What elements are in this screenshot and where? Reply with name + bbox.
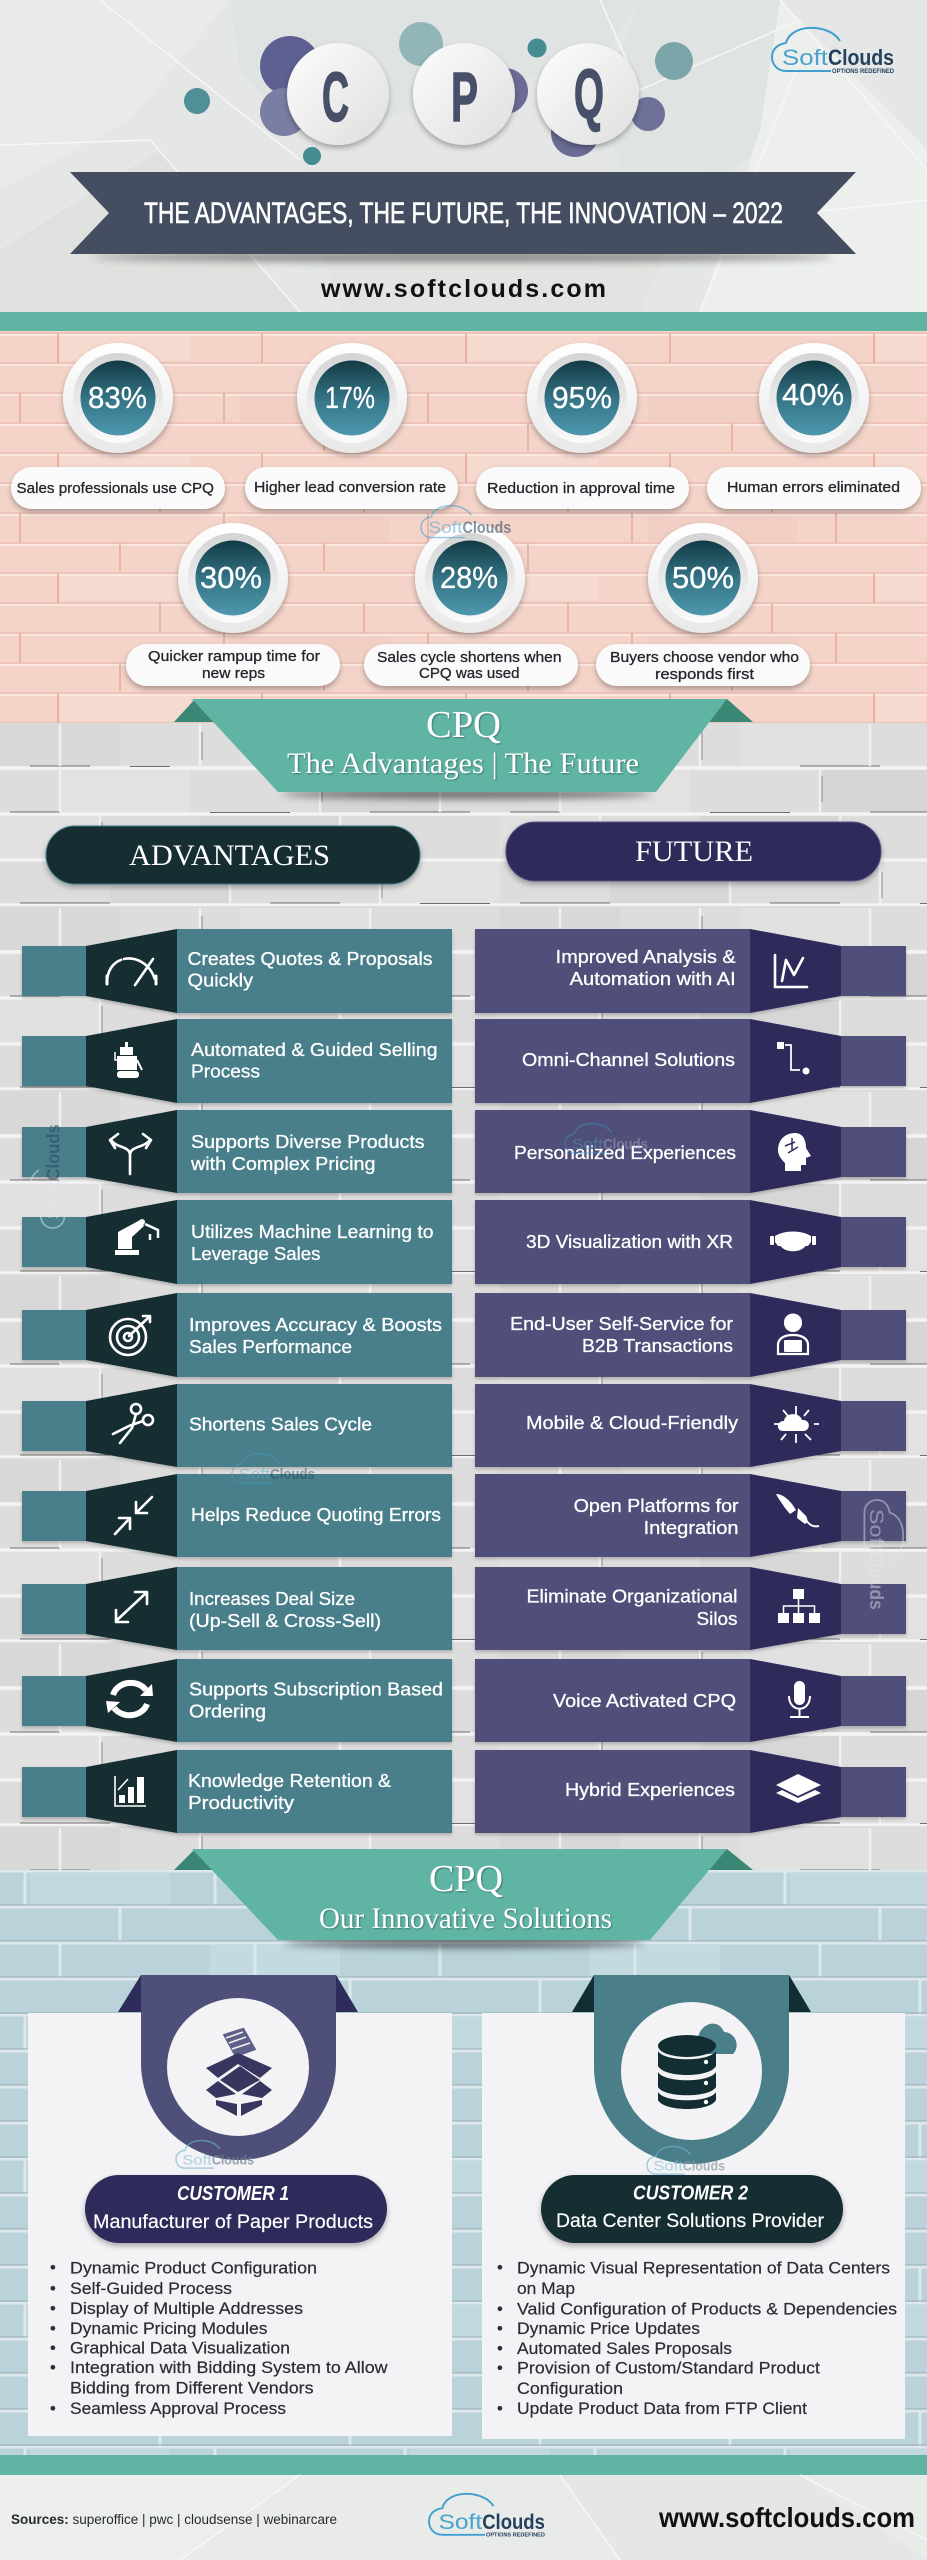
watermark customer 2: Clouds [683,2157,725,2173]
customer 2 list: • [497,2300,503,2318]
banner: the advantages the future [174,699,753,799]
label: human errors: Human errors eliminated [727,479,900,496]
icon: arrows inward [115,1497,152,1534]
stat: 28% [415,523,525,633]
title letter Q: Q [574,55,604,133]
logo footer: Soft [438,2511,482,2534]
customer 1 list: Integration with Bidding System to Allow [70,2359,388,2377]
future 4: 3D Visualization with XR [526,1232,733,1252]
advantage 5: Improves Accuracy & Boosts [189,1315,442,1335]
footer green bar [0,2455,927,2475]
icon: line chart [775,955,807,987]
customer 1 list: • [50,2359,56,2377]
customer 1 list: Display of Multiple Addresses [70,2300,303,2318]
future 7: Integration [644,1518,739,1538]
label: rampup time: new reps [202,665,265,682]
icon: robot arm [115,1219,158,1255]
future 5: B2B Transactions [582,1336,733,1356]
watermark customer 1: Soft [182,2151,212,2167]
title letter C [287,43,389,145]
customer 2 list: • [497,2360,503,2378]
gray brick background [0,723,927,1870]
label: rampup time [126,644,340,686]
footer background [0,2475,927,2560]
advantage 10 [22,1750,452,1833]
banner: our innovative solutions: CPQ [429,1858,503,1900]
logo top right: Soft [782,45,828,70]
future 1: Improved Analysis & [556,947,736,967]
banner: the advantages the future: The Advantages | The Future [287,747,639,780]
customer 1 list: • [50,2400,56,2418]
advantage 3: with Complex Pricing [190,1154,376,1174]
heading pill: future [506,822,881,881]
advantage 1 [22,929,452,1013]
icon: org chart [778,1589,820,1623]
icon: cloud network [774,1406,819,1443]
customer 2 list: Automated Sales Proposals [517,2340,732,2358]
watermark vertical right: Clouds [865,1550,887,1610]
advantage 4: Leverage Sales [191,1244,320,1264]
watermark customer 2 [647,2147,725,2174]
watermark lower left [232,1454,315,1483]
future 5: End-User Self-Service for [510,1314,733,1334]
watermark customer 1 [176,2141,254,2168]
watermark pink [421,506,511,538]
customer 2 pill: Data Center Solutions Provider [556,2211,825,2232]
future 5 [475,1293,906,1377]
customer 1 list [50,2259,388,2418]
sources: Sources: superoffice | pwc | cloudsense | webinarcare [11,2512,337,2527]
advantage 8: Increases Deal Size [189,1589,355,1609]
watermark vertical left: Soft [42,1179,63,1220]
label: rampup time: Quicker rampup time for [148,648,320,665]
icon: arrows outward [116,1592,147,1622]
future 8: Silos [696,1609,738,1629]
label: vendor: Buyers choose vendor who [610,649,799,666]
watermark vertical left: Clouds [42,1124,63,1180]
icon: refresh [106,1683,153,1715]
customer 2 list: • [497,2400,503,2418]
advantage 9: Ordering [189,1702,266,1722]
icon: scissors [113,1404,153,1443]
customer 1 list: Dynamic Pricing Modules [70,2320,268,2338]
advantage 7: Helps Reduce Quoting Errors [191,1505,441,1525]
blue brick background [0,1870,927,2455]
ribbon badge 2 [572,1975,811,2164]
icon: microphone [789,1681,810,1717]
advantage 4: Utilizes Machine Learning to [191,1222,434,1242]
future 3: Personalized Experiences [514,1143,736,1163]
watermark customer 1: Clouds [212,2151,254,2167]
label: approval time: Reduction in approval time [487,480,675,497]
stat: 95% [527,343,637,453]
future 10: Hybrid Experiences [565,1780,735,1800]
heading pill: advantages: ADVANTAGES [129,839,330,872]
label: sales cycle [364,644,578,686]
logo footer: OPTIONS REDEFINED [486,2533,545,2539]
label: approval time [476,467,689,509]
label: vendor: responds first [655,666,755,683]
future 8: Eliminate Organizational [526,1586,738,1606]
decorative circles [184,22,693,165]
title letter P: P [451,58,478,136]
icon: head [778,1133,811,1171]
customer 2 list: on Map [517,2280,575,2298]
customer 1 list: • [50,2340,56,2358]
icon: person at laptop [778,1314,808,1354]
icon: cloud database [658,2024,737,2109]
title letter P [413,43,515,145]
watermark customer 2: Soft [653,2157,683,2173]
advantage 2: Automated & Guided Selling [191,1040,438,1060]
advantage 1: Creates Quotes & Proposals [188,949,432,969]
customer 2 list: Valid Configuration of Products & Dependencies [517,2300,897,2318]
future 1 [475,929,906,1013]
advantage 6: Shortens Sales Cycle [189,1414,372,1434]
advantage 6 [22,1384,452,1467]
customer 2 list: Dynamic Visual Representation of Data Centers [517,2260,890,2278]
logo top right [772,28,895,75]
future 7 [475,1474,906,1557]
watermark vertical right [864,1500,903,1610]
advantage 4 [22,1200,452,1284]
customer 2 list: Dynamic Price Updates [517,2320,700,2338]
watermark right [565,1124,648,1153]
icon: plug [776,1494,819,1526]
watermark right: Soft [572,1136,604,1153]
advantage 8 [22,1567,452,1650]
banner: our innovative solutions [174,1849,753,1948]
advantage 9 [22,1659,452,1742]
future 3 [475,1110,906,1193]
customer 2 list: • [497,2320,503,2338]
icon: flow [777,1042,810,1074]
label: sales cycle: Sales cycle shortens when [377,649,562,666]
icon: layers [776,1774,821,1803]
advantage 2: Process [191,1062,260,1082]
header background [0,0,927,312]
advantage 5: Sales Performance [189,1337,352,1357]
customer 2 pill [541,2175,843,2243]
customer 1 pill: CUSTOMER 1 [177,2183,289,2205]
future 2: Omni-Channel Solutions [522,1050,735,1070]
logo footer: Clouds [482,2511,545,2534]
customer 1 list: • [50,2259,56,2277]
future 1: Automation with AI [570,969,736,989]
future 7: Open Platforms for [574,1496,739,1516]
customer 1 list: Self-Guided Process [70,2280,232,2298]
label: lead conversion: Higher lead conversion rate [254,479,446,496]
stat: 83%: 83% [88,380,147,415]
watermark lower left: Clouds [270,1466,315,1483]
advantage 7 [22,1474,452,1557]
watermark vertical right: Soft [865,1509,887,1551]
icon: robot [115,1042,142,1078]
advantage 3: Supports Diverse Products [191,1132,425,1152]
future 9 [475,1659,906,1742]
logo footer [429,2494,545,2539]
customer 2 list: Configuration [517,2380,623,2398]
advantage 2 [22,1019,452,1103]
heading pill: future: FUTURE [635,835,753,868]
future 8 [475,1567,906,1650]
customer 1 list: Graphical Data Visualization [70,2340,290,2358]
icon: bar chart [115,1776,146,1806]
stat: 30% [178,523,288,633]
advantage 8: (Up-Sell & Cross-Sell) [189,1611,381,1631]
customer 2 list: Update Product Data from FTP Client [517,2400,807,2418]
label: human errors [707,467,921,509]
label: sales cycle: CPQ was used [419,665,520,682]
panel: customer 1 [28,1975,452,2436]
icon: xr goggles [770,1232,816,1251]
advantage 10: Productivity [188,1793,294,1813]
advantage 1: Quickly [188,970,253,990]
customer 1 list: • [50,2320,56,2338]
future 10 [475,1750,906,1833]
future 6 [475,1384,906,1467]
stat: 95%: 95% [552,380,612,415]
title letter C: C [322,58,349,136]
panel: customer 2 [482,1975,905,2439]
stat: 83% [63,343,173,453]
customer 2 pill: CUSTOMER 2 [633,2182,748,2204]
future 9: Voice Activated CPQ [553,1691,736,1711]
label: sales professionals [11,467,225,509]
icon: speedometer [107,958,156,985]
pink brick background [0,331,927,723]
advantage 5 [22,1293,452,1377]
icon: split arrows [110,1134,151,1174]
watermark right: Clouds [603,1136,648,1153]
stat: 50% [648,523,758,633]
watermark vertical left [28,1124,64,1228]
stat: 17%: 17% [325,380,375,415]
watermark pink: Clouds [462,519,511,537]
stat: 17% [297,343,407,453]
heading pill: advantages [46,826,420,884]
customer 2 list: • [497,2340,503,2358]
logo top right: OPTIONS REDEFINED [832,69,895,75]
customer 1 list: • [50,2300,56,2318]
title ribbon [70,172,856,262]
customer 1 list: • [50,2280,56,2298]
future 4 [475,1200,906,1284]
label: sales professionals: Sales professionals use CPQ [16,480,214,497]
website url: www.softclouds.com [320,275,606,303]
label: vendor [596,644,810,686]
advantage 10: Knowledge Retention & [188,1771,391,1791]
ribbon badge 1 [118,1975,358,2160]
label: lead conversion [245,467,458,509]
icon: box with papers [206,2027,272,2116]
watermark lower left: Soft [239,1466,271,1483]
customer 1 list: Dynamic Product Configuration [70,2260,317,2278]
customer 1 pill: Manufacturer of Paper Products [93,2212,373,2233]
future 6: Mobile & Cloud-Friendly [526,1413,738,1433]
stat: 40% [759,343,869,453]
customer 1 list: Seamless Approval Process [70,2400,286,2418]
stat: 50%: 50% [672,560,734,595]
customer 2 list: • [497,2259,503,2277]
customer 2 list: Provision of Custom/Standard Product [517,2360,820,2378]
logo top right: Clouds [828,45,894,70]
stat: 40%: 40% [782,377,844,412]
green divider [0,312,927,331]
banner: our innovative solutions: Our Innovative Solutions [319,1902,612,1935]
advantage 9: Supports Subscription Based [189,1680,443,1700]
future 2 [475,1019,906,1103]
stat: 28%: 28% [440,560,498,595]
stat: 30%: 30% [200,560,262,595]
advantage 3 [22,1110,452,1193]
icon: target [110,1316,150,1355]
customer 1 list: Bidding from Different Vendors [70,2380,314,2398]
customer 1 pill [85,2175,387,2243]
customer 2 list [497,2259,897,2418]
watermark pink: Soft [428,519,463,537]
title letter Q [537,43,639,145]
banner: the advantages the future: CPQ [426,704,501,746]
